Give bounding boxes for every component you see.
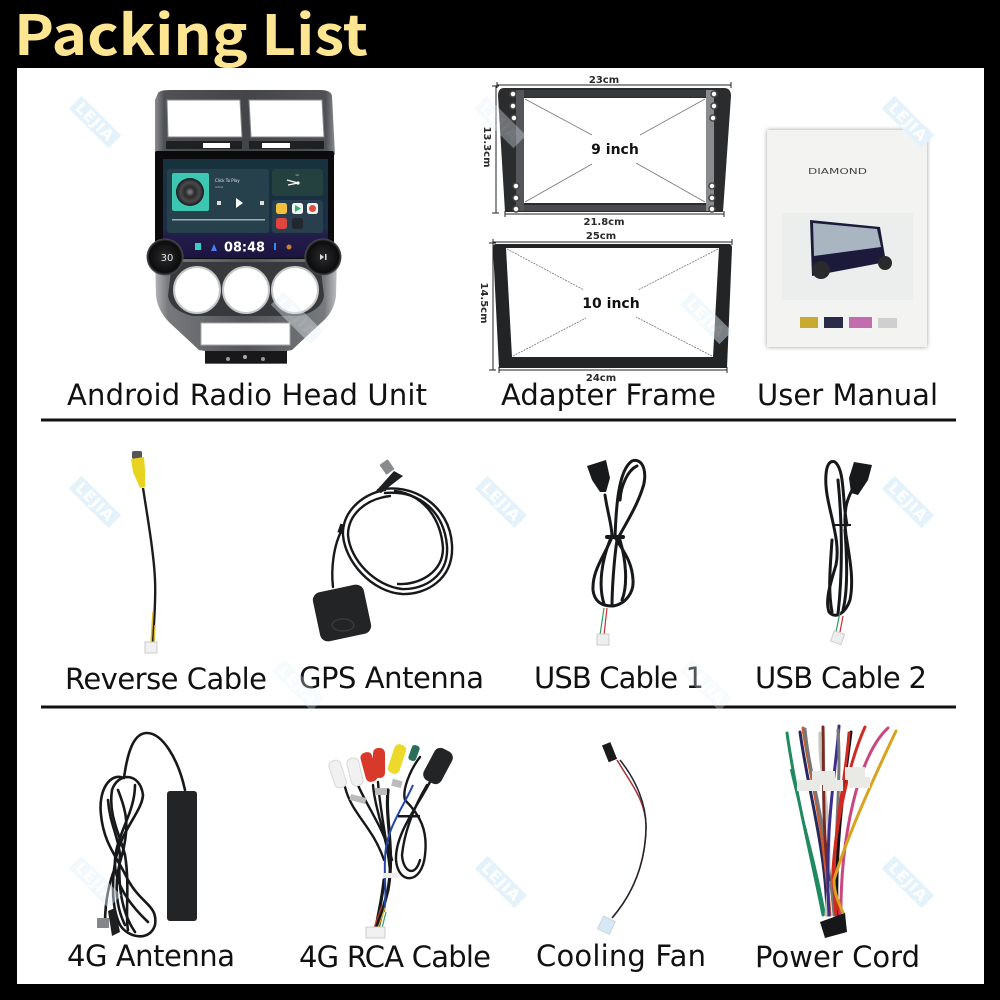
music card: Artist	[215, 185, 224, 189]
watermarks: LEJIA	[478, 479, 524, 525]
label: 4g rca cable: 4G RCA Cable	[299, 940, 491, 974]
dock with clock	[195, 240, 292, 256]
watermarks: LEJIA	[274, 295, 320, 341]
watermarks: LEJIA	[477, 99, 523, 145]
app icons card	[272, 200, 323, 233]
watermarks: LEJIA	[275, 662, 321, 708]
clock card: 12	[295, 173, 299, 177]
head unit upper bezel	[155, 90, 335, 155]
screen	[155, 151, 334, 259]
watermarks: LEJIA	[885, 99, 931, 145]
dimension: 13.3cm: 13.3cm	[481, 126, 492, 168]
icon: android radio head unit	[146, 90, 342, 364]
dimension: 21.8cm: 21.8cm	[583, 217, 625, 228]
icon: cooling fan cable	[598, 742, 646, 934]
watermarks: LEJIA	[478, 859, 524, 905]
dimension: 25cm: 25cm	[586, 231, 616, 242]
dimension lines	[492, 82, 731, 217]
knob: right	[304, 238, 342, 276]
watermarks: LEJIA	[885, 859, 931, 905]
rca plugs	[328, 743, 455, 804]
divider	[41, 418, 956, 422]
dock with clock: 08:48	[224, 240, 265, 256]
icon: user manual	[767, 130, 927, 347]
icon: adapter frame 10 inch	[478, 231, 732, 384]
watermarks: LEJIA	[683, 662, 729, 708]
knob: left: 30	[161, 253, 173, 264]
dimension lines	[489, 239, 732, 373]
label: reverse cable: Reverse Cable	[65, 662, 267, 696]
watermarks: LEJIA	[683, 295, 729, 341]
clock card	[272, 169, 323, 196]
music card: Click To Play	[215, 178, 240, 183]
label: usb cable 2: USB Cable 2	[755, 661, 927, 695]
diagonal dashes	[525, 99, 705, 202]
dimension: 14.5cm: 14.5cm	[478, 282, 489, 324]
divider	[41, 706, 956, 708]
text: 10 inch: 10 inch	[582, 296, 640, 312]
diagonal dashes	[507, 249, 718, 356]
dimension: 23cm: 23cm	[589, 75, 619, 86]
label: gps antenna: GPS Antenna	[299, 661, 484, 695]
watermarks: LEJIA	[72, 479, 118, 525]
icon: reverse cable	[131, 451, 157, 653]
icon: 4g rca cable	[328, 743, 455, 938]
label: usb cable 1: USB Cable 1	[534, 661, 704, 695]
label: adapter frame: Adapter Frame	[501, 378, 716, 412]
climate control holes	[174, 267, 220, 313]
icon: adapter frame 9 inch	[481, 75, 731, 228]
label: android radio head unit: Android Radio Head Unit	[67, 378, 427, 412]
icon: usb cable 2	[826, 462, 872, 645]
watermarks	[69, 96, 934, 908]
label: 4g antenna: 4G Antenna	[67, 939, 235, 973]
icon: gps antenna	[311, 459, 452, 643]
dimension: 24cm: 24cm	[586, 373, 616, 384]
icon: 4g antenna	[97, 733, 197, 936]
icon: power cord	[787, 726, 896, 938]
icon: user manual: DIAMOND	[808, 167, 867, 176]
head unit lower bezel	[155, 255, 337, 364]
music card	[167, 169, 269, 233]
knob: left	[146, 238, 184, 276]
watermarks: LEJIA	[885, 479, 931, 525]
watermarks: LEJIA	[72, 859, 118, 905]
icon: usb cable 1	[587, 460, 645, 645]
text: 9 inch: 9 inch	[591, 142, 639, 158]
label: cooling fan: Cooling Fan	[536, 939, 706, 973]
watermarks: LEJIA	[72, 99, 118, 145]
label: power cord: Power Cord	[755, 940, 920, 974]
vents	[167, 100, 242, 137]
label: user manual: User Manual	[757, 378, 938, 412]
